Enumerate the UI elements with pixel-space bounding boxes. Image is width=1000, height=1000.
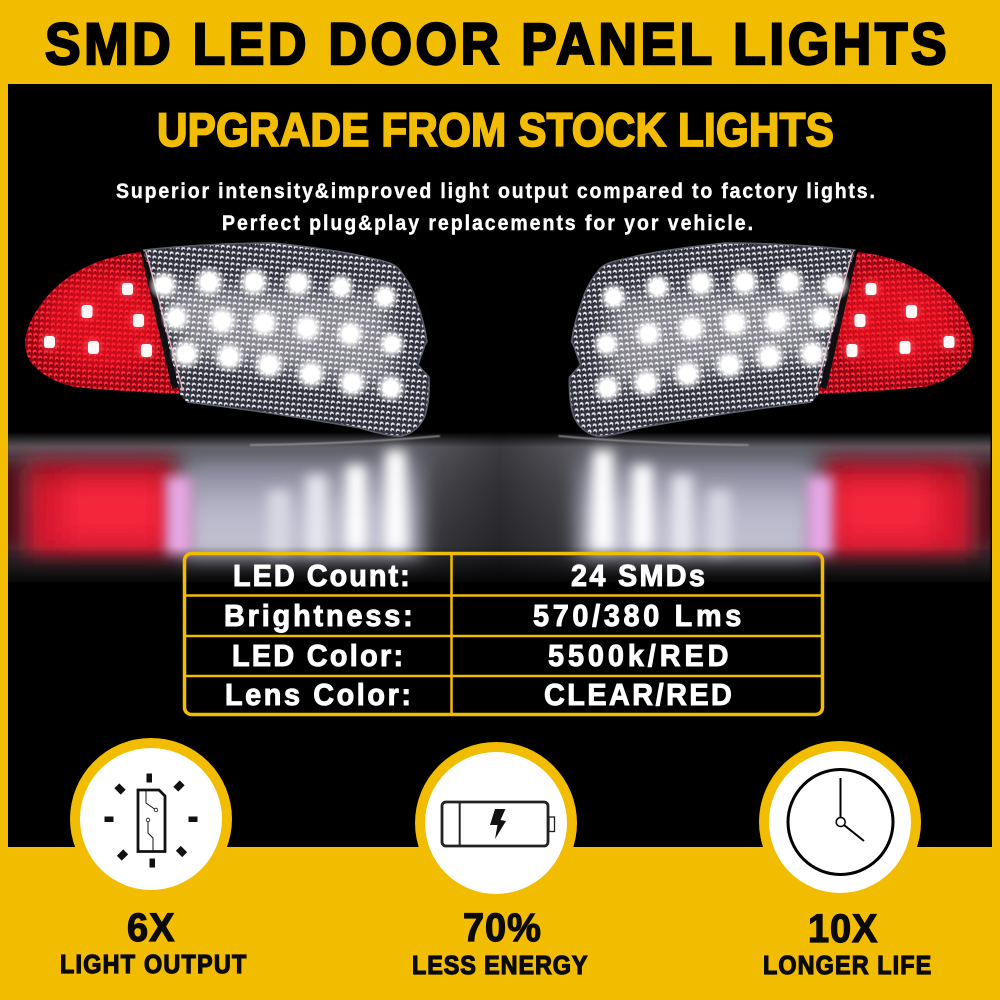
stat: 6X light output [60,906,246,979]
right door panel light [569,243,974,436]
text block: description: Superior intensity&improved light output compared to factory lights. [116,180,875,203]
specification table [184,554,822,714]
stat: 6X light output: LIGHT OUTPUT [60,951,246,979]
stat: 70% less energy: LESS ENERGY [412,952,588,980]
text block: description [116,180,875,235]
row: lens color [225,678,732,712]
icon: LED chip in circle [70,738,232,900]
row: brightness: 570/380 Lms [533,599,741,633]
stat: 10X longer life: LONGER LIFE [763,952,931,980]
row: LED color [232,639,728,673]
icon: clock in circle [759,741,921,903]
stat: 6X light output: 6X [127,906,175,950]
row: brightness: Brightness: [224,599,413,633]
reflection on the floor [8,433,990,582]
row: brightness [224,599,741,633]
main title: SMD LED DOOR PANEL LIGHTS [45,12,947,76]
stat: 10X longer life [763,907,931,980]
row: lens color: Lens Color: [225,678,411,712]
panel: black photo panel [8,84,992,847]
text block: description: Perfect plug&play replacements for yor vehicle. [222,212,753,235]
row: LED count: 24 SMDs [571,559,705,593]
row: LED count: LED Count: [233,559,410,593]
row: LED count [233,559,705,593]
row: LED color: LED Color: [232,639,403,673]
left door panel light [25,243,429,436]
row: lens color: CLEAR/RED [544,678,732,712]
stat: 70% less energy [412,906,588,980]
stat: 70% less energy: 70% [463,906,541,950]
stat: 10X longer life: 10X [808,907,877,951]
heading: upgrade: UPGRADE FROM STOCK LIGHTS [157,105,834,157]
row: LED color: 5500k/RED [548,639,728,673]
icon: battery in circle [415,742,577,904]
